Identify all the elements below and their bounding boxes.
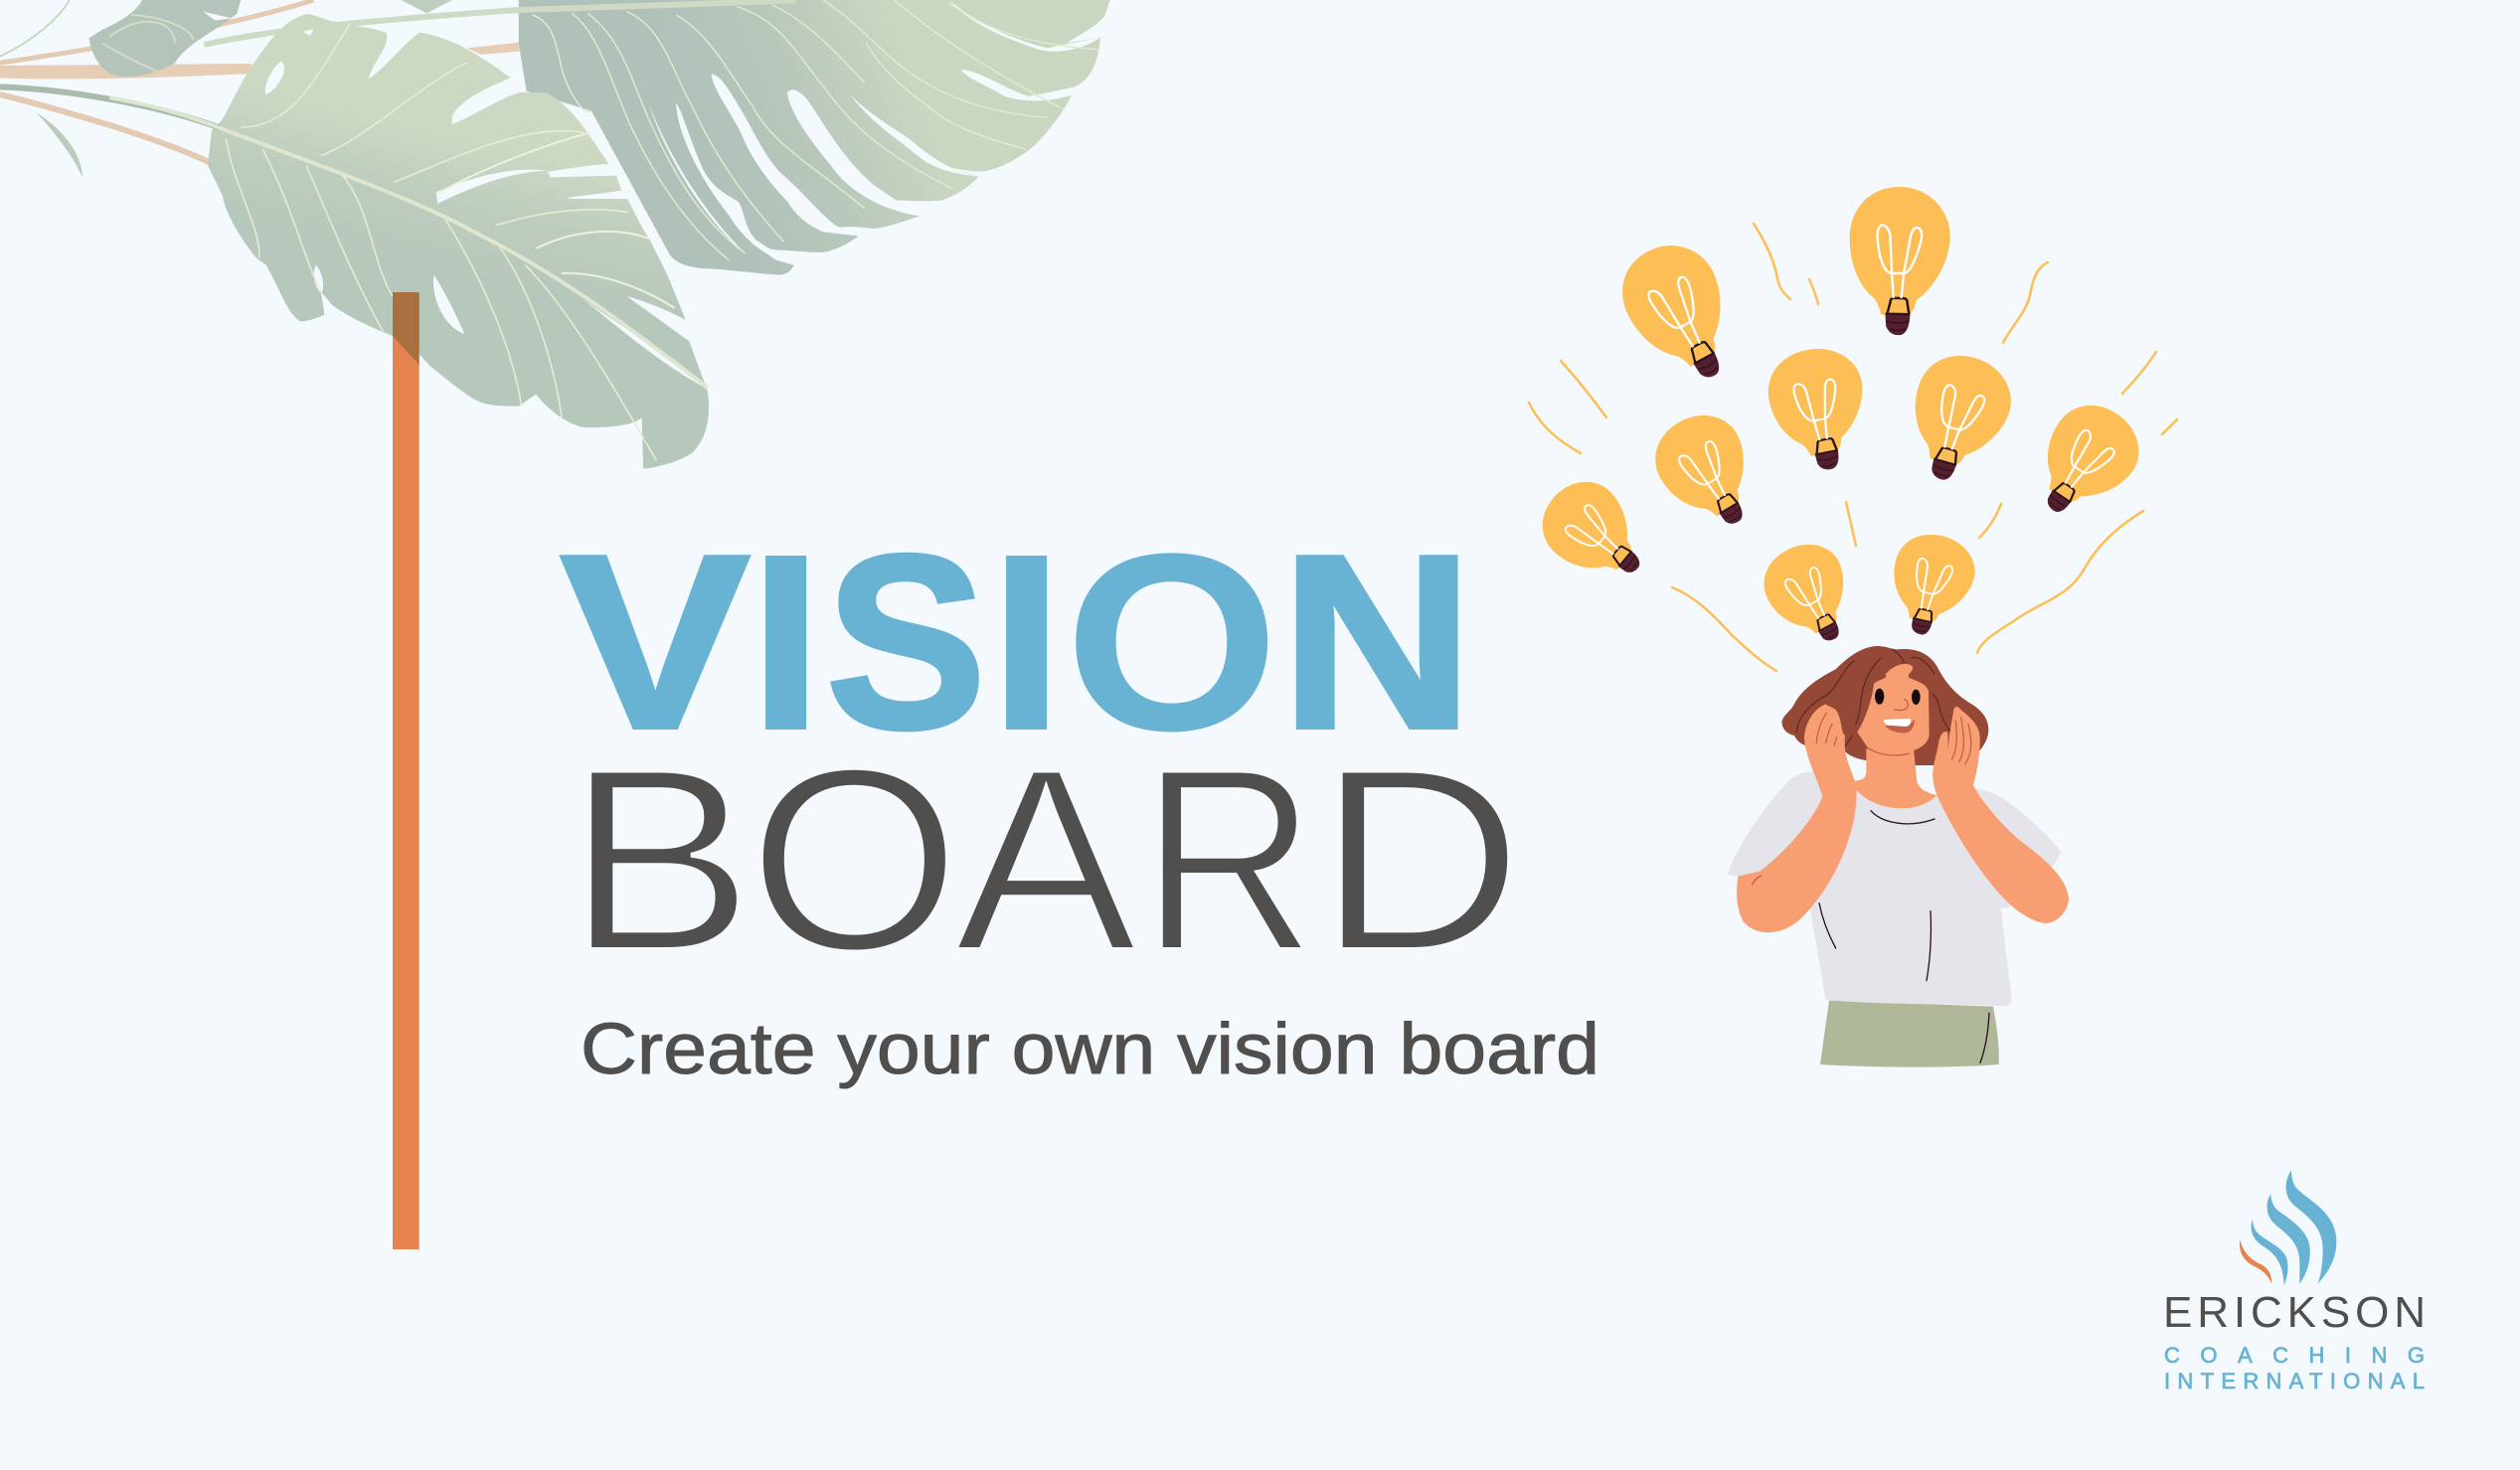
bulb bottom left [1752, 531, 1870, 658]
logo line INTERNATIONAL: INTERNATIONAL [2164, 1369, 2425, 1393]
title [561, 501, 1524, 1006]
logo flame mark [2240, 1170, 2336, 1285]
squiggle lines around bulbs [1529, 224, 2177, 671]
right arm and hand [1932, 707, 2069, 923]
palm leaves decoration [0, 0, 1110, 469]
bulb right [2016, 390, 2154, 535]
small top-left leaf [89, 0, 241, 77]
hair [1782, 646, 1988, 765]
upper midrib [204, 0, 795, 45]
title word: VISION: I [747, 501, 825, 784]
logo: Erickson Coaching International [2163, 1170, 2426, 1393]
light bulbs [1527, 186, 2154, 658]
shirt [1728, 771, 2061, 1006]
upper large leaf [519, 0, 1110, 275]
pants [1820, 1001, 1999, 1067]
subtitle: Create your own vision board [581, 1010, 1599, 1089]
title word: BOARD: D [1316, 715, 1524, 1006]
title word: BOARD [566, 714, 1524, 1006]
title word: VISION: O [1065, 502, 1279, 783]
bulb top [1848, 186, 1951, 336]
bulb left middle [1640, 400, 1776, 545]
woman illustration [1728, 646, 2069, 1067]
title word: VISION: S [825, 504, 986, 781]
left arm and hand [1737, 704, 1857, 932]
bulb centre [1762, 341, 1877, 478]
bar overlap shade under leaf [393, 292, 420, 365]
thin blades and stems [0, 0, 519, 177]
logo line COACHING: COACHING [2164, 1343, 2425, 1368]
bulb bottom right [1881, 527, 1982, 643]
hair strands, nose, finger lines and clothing creases [1753, 650, 1989, 1062]
title word: BOARD: O [748, 715, 961, 1006]
bulb right centre [1896, 345, 2021, 492]
lower large leaf [208, 14, 709, 469]
face [1857, 664, 1930, 755]
bulb far left [1527, 466, 1664, 599]
logo wordmark ERICKSON: ERICKSON [2163, 1288, 2426, 1337]
title word: BOARD: A [954, 715, 1138, 1006]
lower midrib [0, 86, 708, 388]
title word: BOARD: B [566, 714, 755, 1005]
title word: BOARD: R [1140, 714, 1316, 1005]
title word: VISION: V [561, 503, 752, 780]
title word: VISION: I [987, 501, 1066, 784]
orange vertical bar [393, 292, 420, 1249]
title word: VISION: N [1280, 504, 1474, 781]
bulb upper left [1606, 229, 1757, 398]
mouth [1884, 719, 1915, 734]
eyes [1875, 689, 1921, 705]
title word: VISION [561, 501, 1474, 784]
neck [1855, 748, 1936, 808]
